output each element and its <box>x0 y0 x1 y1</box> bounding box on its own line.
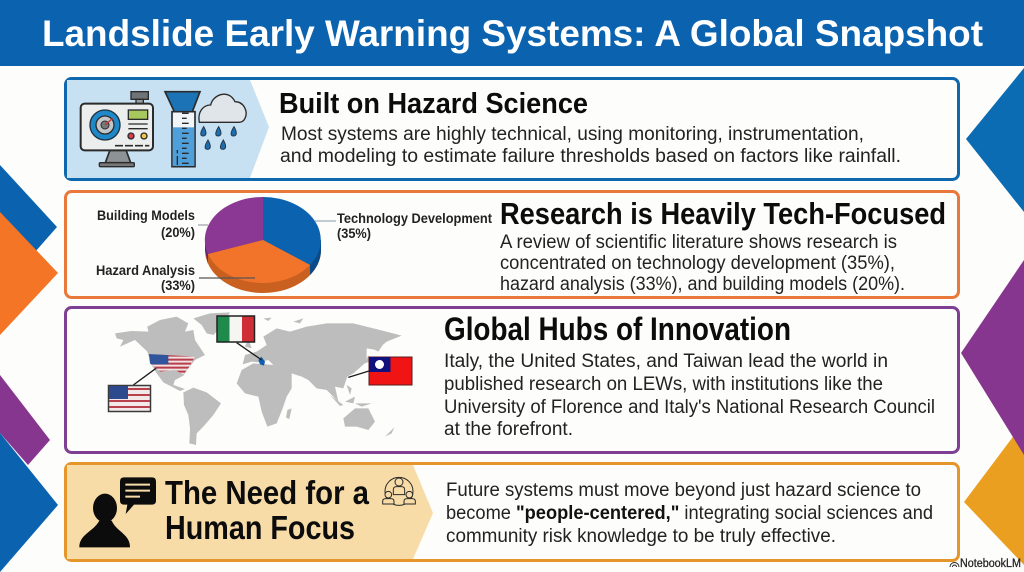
body text: published research on LEWs, with institutions like the <box>444 374 883 395</box>
label: technology development <box>337 210 492 241</box>
flag: taiwan <box>369 357 412 385</box>
title: Landslide Early Warning Systems: A Global Snapshot <box>42 13 983 54</box>
label: building models: Building Models <box>97 207 195 223</box>
body text: at the forefront. <box>444 419 573 440</box>
header banner <box>0 0 1024 66</box>
left decorative triangles <box>0 165 58 572</box>
icon: rain gauge <box>165 92 200 167</box>
panel: built on hazard science <box>66 78 958 180</box>
label: hazard analysis: Hazard Analysis <box>96 262 195 278</box>
heading: Research is Heavily Tech-Focused <box>500 196 946 231</box>
flag: usa <box>108 386 150 412</box>
body text: become "people-centered," integrating social sciences and <box>446 503 933 524</box>
heading: Human Focus <box>165 509 355 546</box>
body text <box>280 124 901 167</box>
label: technology development: Technology Development <box>337 210 492 226</box>
label: hazard analysis <box>96 262 195 293</box>
heading: The Need for a <box>165 474 370 511</box>
icon: monitoring station <box>81 92 153 167</box>
usa flag overlay <box>149 354 195 374</box>
body text: concentrated on technology development (35%), <box>500 253 895 274</box>
panel: the need for a human focus <box>66 464 958 560</box>
panel: global hubs of innovation <box>66 308 958 452</box>
heading: Global Hubs of Innovation <box>444 311 791 347</box>
right decorative triangles <box>961 68 1024 565</box>
pie chart <box>198 197 336 293</box>
body text: and modeling to estimate failure thresholds based on factors like rainfall. <box>280 146 901 167</box>
body text: Most systems are highly technical, using monitoring, instrumentation, <box>281 124 864 145</box>
body text: hazard analysis (33%), and building models (20%). <box>500 274 905 295</box>
body text: Italy, the United States, and Taiwan lead the world in <box>444 351 888 372</box>
icon: rain cloud <box>199 94 246 149</box>
watermark: NotebookLM: NotebookLM <box>960 558 1021 570</box>
panel: research is tech-focused <box>66 192 958 298</box>
body text <box>500 232 905 295</box>
flag: italy <box>217 316 254 342</box>
body text: University of Florence and Italy's National Research Council <box>444 397 935 418</box>
icon: person with speech bubble <box>79 477 156 547</box>
world map <box>115 312 402 445</box>
label: building models <box>97 207 195 240</box>
body text <box>446 480 933 547</box>
connector lines <box>133 343 369 385</box>
label: hazard analysis: (33%) <box>161 277 195 293</box>
leader lines <box>198 224 208 226</box>
body text: community risk knowledge to be truly effective. <box>446 526 836 547</box>
label: building models: (20%) <box>161 224 195 240</box>
label: technology development: (35%) <box>337 225 371 241</box>
body text: Future systems must move beyond just hazard science to <box>446 480 921 501</box>
heading <box>165 474 370 546</box>
heading: Built on Hazard Science <box>279 88 588 120</box>
icon: community ring <box>383 477 415 505</box>
body text: A review of scientific literature shows research is <box>500 232 897 253</box>
body text <box>444 351 935 440</box>
